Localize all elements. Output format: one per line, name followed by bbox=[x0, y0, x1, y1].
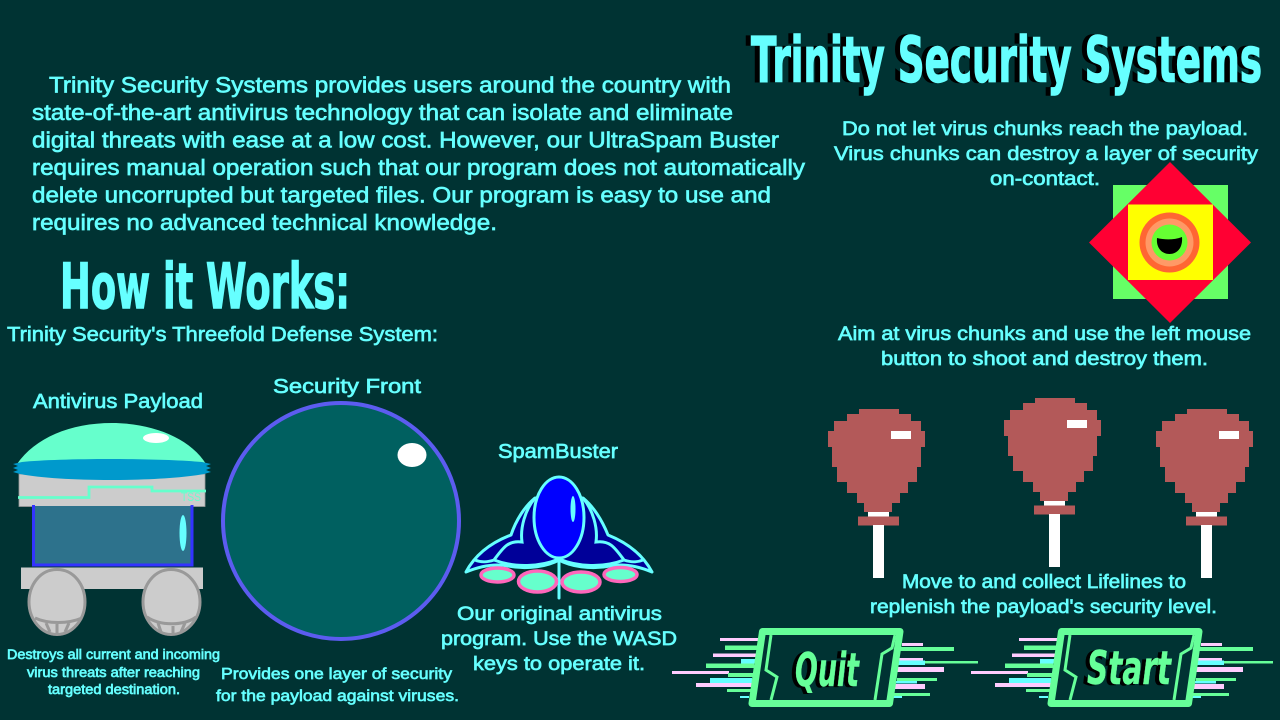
ship pods bbox=[481, 568, 637, 592]
glass highlight bbox=[180, 515, 186, 551]
instruction: aim and shoot: button to shoot and destroy them. bbox=[881, 349, 1208, 370]
icon: virus chunk bbox=[1089, 162, 1251, 323]
panel: spambuster bbox=[441, 441, 677, 675]
front description: Provides one layer of security bbox=[221, 666, 452, 683]
ship cockpit bbox=[534, 477, 584, 558]
instruction: virus chunks warning bbox=[834, 119, 1259, 190]
ship stem bbox=[558, 556, 560, 598]
icon: lifeline right bbox=[1156, 409, 1253, 578]
instruction: collect lifelines bbox=[870, 572, 1217, 618]
dome highlight bbox=[143, 433, 169, 443]
instruction: aim and shoot: Aim at virus chunks and use the left mouse bbox=[838, 324, 1251, 345]
shield sphere bbox=[223, 403, 459, 639]
cockpit highlight bbox=[570, 496, 576, 522]
intro paragraph: requires no advanced technical knowledge. bbox=[32, 210, 497, 235]
spambuster description: Our original antivirus bbox=[457, 604, 662, 625]
icon: lifeline middle bbox=[1004, 398, 1101, 567]
label: spambuster: SpamBuster bbox=[498, 441, 618, 463]
payload description: virus threats after reaching bbox=[27, 665, 200, 680]
glass compartment bbox=[34, 506, 192, 565]
hull mark: TSS bbox=[181, 490, 201, 504]
intro paragraph: requires manual operation such that our program does not automatically bbox=[32, 155, 805, 180]
panel: antivirus payload bbox=[7, 391, 220, 697]
blue band bbox=[13, 459, 211, 480]
spambuster description: program. Use the WASD bbox=[441, 629, 677, 650]
payload description: Destroys all current and incoming bbox=[7, 647, 220, 662]
subheading: threefold defense: Trinity Security's Threefold Defense System: bbox=[7, 324, 438, 346]
button: start bbox=[971, 632, 1273, 704]
platform bbox=[21, 568, 203, 589]
label: antivirus payload: Antivirus Payload bbox=[33, 391, 203, 413]
instruction: virus chunks warning: on-contact. bbox=[990, 169, 1100, 190]
intro paragraph: digital threats with ease at a low cost. However, our UltraSpam Buster bbox=[32, 128, 779, 152]
right wheel bbox=[143, 570, 200, 634]
wing detail lines bbox=[475, 498, 643, 566]
instruction: collect lifelines: replenish the payload's security level. bbox=[870, 597, 1217, 618]
label: security front: Security Front bbox=[273, 376, 422, 398]
payload description bbox=[7, 647, 220, 697]
instruction: virus chunks warning: Do not let virus chunks reach the payload. bbox=[842, 119, 1248, 140]
button: quit bbox=[672, 632, 978, 704]
payload hull bbox=[19, 474, 205, 506]
sphere highlight bbox=[398, 443, 426, 467]
ship wings bbox=[466, 498, 652, 572]
spambuster description: keys to operate it. bbox=[473, 654, 645, 675]
payload dome bbox=[17, 423, 206, 464]
intro paragraph: Trinity Security Systems provides users around the country with bbox=[49, 72, 731, 98]
spambuster description bbox=[441, 604, 677, 675]
icon: lifeline left bbox=[828, 409, 925, 578]
intro paragraph bbox=[32, 72, 805, 235]
payload description: targeted destination. bbox=[48, 682, 180, 697]
instruction: collect lifelines: Move to and collect Lifelines to bbox=[902, 572, 1186, 593]
hull trim line bbox=[18, 487, 206, 498]
instruction: virus chunks warning: Virus chunks can destroy a layer of security bbox=[834, 144, 1259, 165]
left wheel bbox=[29, 570, 85, 634]
button: start: Start bbox=[1083, 642, 1168, 696]
heading: how it works: How it Works: bbox=[60, 250, 350, 323]
button: quit: Quit bbox=[791, 644, 856, 698]
intro paragraph: state-of-the-art antivirus technology that can isolate and eliminate bbox=[32, 100, 733, 125]
intro paragraph: delete uncorrupted but targeted files. Our program is easy to use and bbox=[32, 182, 771, 208]
button: quit: Quit bbox=[795, 643, 860, 697]
panel: security front bbox=[216, 376, 459, 705]
button: start: Start bbox=[1087, 641, 1172, 695]
instruction: aim and shoot bbox=[838, 324, 1251, 370]
front description bbox=[216, 666, 459, 705]
front description: for the payload against viruses. bbox=[216, 688, 459, 705]
